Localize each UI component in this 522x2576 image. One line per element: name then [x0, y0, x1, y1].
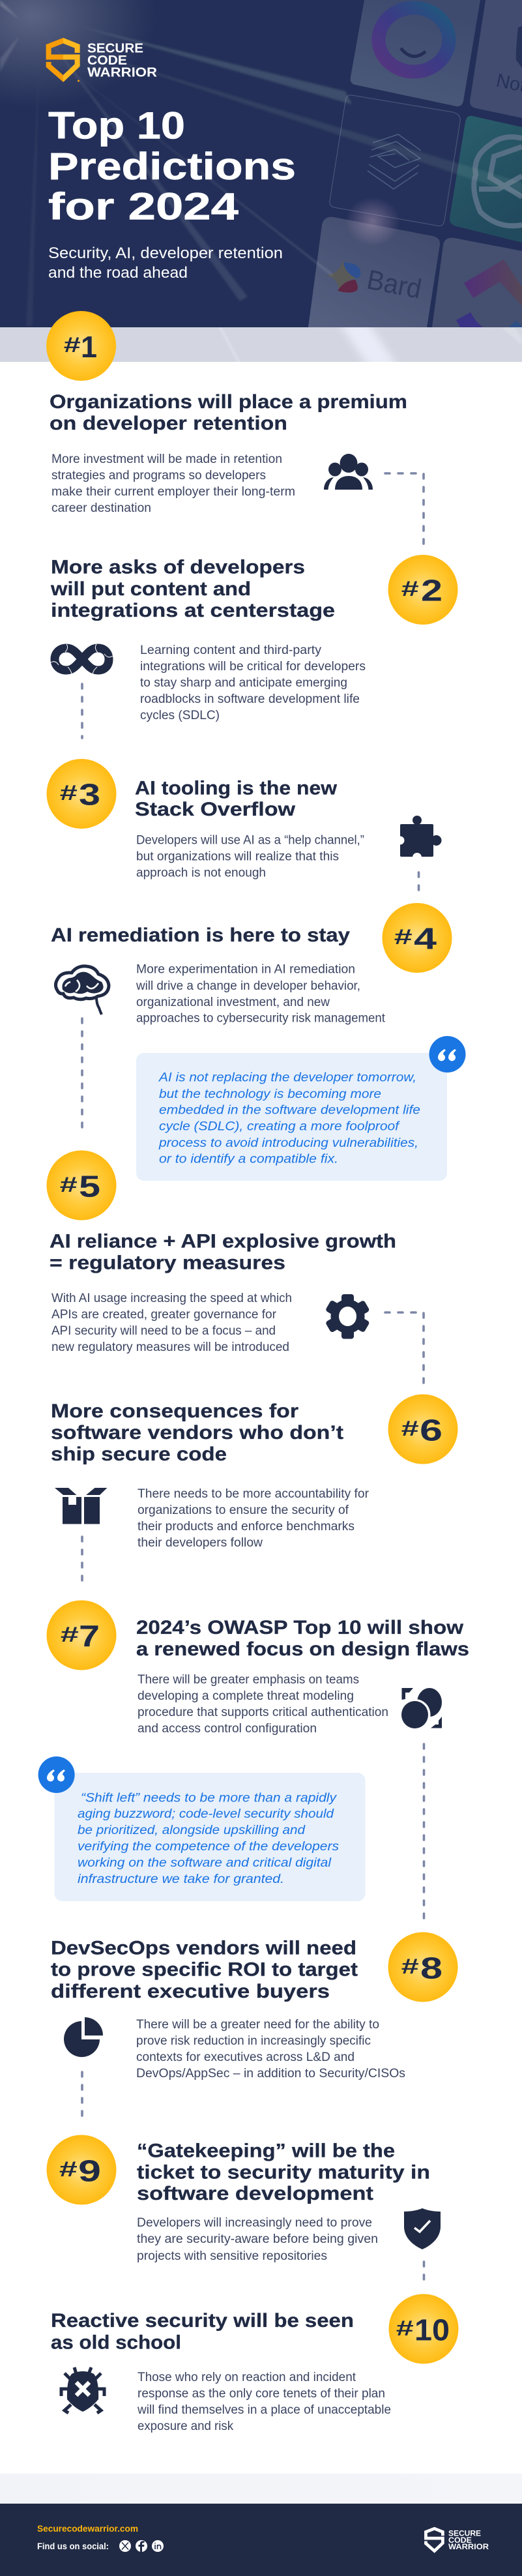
badge: number 3: 3	[79, 778, 100, 812]
badge: number 9	[47, 2135, 116, 2205]
light band under header	[0, 327, 522, 362]
body 2: to stay sharp and anticipate emerging	[140, 676, 347, 690]
heading 9: ticket to security maturity in	[137, 2162, 430, 2184]
body 7	[138, 1673, 388, 1736]
body 5: new regulatory measures will be introduced	[51, 1340, 289, 1354]
badge: number 7: 7	[79, 1619, 100, 1653]
body 2: roadblocks in software development life	[140, 692, 360, 706]
badge: number 4: 4	[414, 922, 437, 956]
panel: prediction 8	[51, 1932, 457, 2116]
badge: number 5: #	[59, 1173, 77, 1196]
heading 9: software development	[137, 2183, 373, 2204]
heading 8: DevSecOps vendors will need	[51, 1938, 356, 1959]
badge: number 3	[47, 759, 116, 829]
icon: bug	[61, 2367, 104, 2413]
heading 1: Organizations will place a premium	[50, 391, 407, 413]
body 8: There will be a greater need for the ability to	[136, 2018, 379, 2032]
icon: quote mark	[38, 1756, 75, 1793]
body 3: but organizations will realize that this	[136, 850, 339, 863]
panel: prediction 7	[38, 1600, 469, 1920]
heading 3	[135, 777, 337, 820]
badge: number 1: 1	[81, 330, 97, 364]
icon: puzzle piece	[396, 816, 442, 862]
body 8: contexts for executives across L&D and	[136, 2050, 355, 2064]
icon: pie chart	[64, 2017, 103, 2057]
card: stacked layers logo	[330, 95, 460, 226]
heading 10: Reactive security will be seen	[51, 2310, 354, 2332]
heading 10: as old school	[51, 2332, 181, 2354]
icon: shield check	[404, 2208, 441, 2249]
icon: quote mark	[429, 1036, 465, 1073]
panel: prediction 2	[50, 555, 458, 738]
body 6: organizations to ensure the security of	[138, 1503, 349, 1517]
card: ChatGPT logo	[450, 116, 522, 243]
callout: AI quote: AI is not replacing the developer tomorrow,	[158, 1071, 416, 1085]
body 9: they are security-aware before being given	[137, 2232, 378, 2246]
footer light band	[0, 2474, 522, 2504]
callout: shift left quote: working on the software and critical digital	[78, 1856, 332, 1870]
badge: number 4: #	[394, 925, 412, 949]
badge: number 10	[388, 2294, 459, 2364]
logo: Secure Code Warrior: WARRIOR	[87, 65, 157, 80]
callout: AI quote: cycle (SDLC), creating a more foolproof	[159, 1120, 400, 1134]
body 1: career destination	[51, 501, 151, 515]
heading 2: More asks of developers	[51, 557, 305, 578]
body 9: Developers will increasingly need to prove	[137, 2216, 372, 2230]
body 4: will drive a change in developer behavior,	[136, 979, 360, 993]
panel: footer	[0, 2504, 522, 2576]
title: for 2024	[48, 185, 239, 228]
lens flare	[345, 197, 400, 246]
arrow: 3 to 4	[418, 872, 420, 892]
heading 6: software vendors who don’t	[51, 1422, 343, 1443]
panel: prediction 4	[51, 903, 465, 1181]
body 6: their products and enforce benchmarks	[138, 1520, 355, 1533]
badge: number 4	[382, 903, 452, 973]
body 2: Learning content and third-party	[140, 644, 322, 657]
arrow: 2 to 3	[81, 684, 83, 738]
heading 6	[51, 1400, 343, 1465]
body 1	[51, 452, 295, 515]
badge: number 10: #	[396, 2317, 413, 2340]
badge: number 9: #	[59, 2157, 77, 2181]
badge: number 8: 8	[420, 1951, 442, 1985]
icon: X	[119, 2540, 131, 2552]
body 2: cycles (SDLC)	[140, 709, 220, 722]
title: Predictions	[48, 145, 296, 188]
body 10: Those who rely on reaction and incident	[138, 2371, 356, 2384]
body 8	[136, 2018, 405, 2080]
body 7: There will be greater emphasis on teams	[138, 1673, 359, 1687]
arrow: 9 to 10	[423, 2262, 425, 2281]
heading 5: AI reliance + API explosive growth	[50, 1231, 396, 1252]
callout: shift left quote: “Shift left” needs to be more than a rapidly	[81, 1791, 338, 1805]
panel: prediction 9	[47, 2135, 441, 2281]
body 3: approach is not enough	[136, 866, 266, 880]
icon: open box	[55, 1488, 107, 1524]
body 10: will find themselves in a place of unacceptable	[137, 2403, 391, 2417]
icon: gear	[325, 1294, 370, 1339]
heading 2: integrations at centerstage	[51, 600, 335, 621]
callout: AI quote: or to identify a compatible fix.	[159, 1153, 338, 1166]
badge: number 6: #	[401, 1417, 418, 1440]
callout: shift left quote: verifying the competence of the developers	[78, 1840, 340, 1854]
badge: number 3: #	[59, 781, 77, 805]
logo: Secure Code Warrior: SECURE	[87, 41, 143, 56]
badge: number 1	[46, 311, 116, 381]
arrow: 5 to 6	[385, 1312, 424, 1385]
card: Bard logo: Bard	[364, 264, 424, 304]
badge: number 5: 5	[79, 1170, 100, 1204]
logo: footer: CODE	[448, 2537, 472, 2545]
arrow: 8 to 9	[81, 2072, 83, 2116]
badge: number 7	[47, 1600, 116, 1670]
badge: number 8: #	[401, 1955, 418, 1978]
heading 9	[137, 2140, 430, 2204]
callout: shift left quote	[55, 1773, 365, 1901]
body 6: their developers follow	[138, 1536, 263, 1550]
badge: number 2: #	[401, 577, 418, 600]
callout: shift left quote: be prioritized, alongside upskilling and	[78, 1824, 306, 1837]
heading 7: 2024’s OWASP Top 10 will show	[136, 1617, 463, 1638]
body 5: API security will need to be a focus – and	[51, 1324, 276, 1338]
heading 4: AI remediation is here to stay	[51, 925, 351, 946]
badge: number 7: #	[60, 1623, 78, 1646]
body 4: organizational investment, and new	[136, 996, 330, 1009]
heading 1	[50, 391, 407, 434]
heading 2: will put content and	[50, 578, 251, 600]
body 3	[136, 833, 364, 880]
title: Top 10	[48, 104, 185, 147]
arrow: 7 to 8	[423, 1744, 425, 1920]
body 8: DevOps/AppSec – in addition to Security/CISOs	[136, 2067, 405, 2080]
body 8: prove risk reduction in increasingly specific	[136, 2034, 371, 2048]
card: Bard logo	[308, 217, 440, 327]
panel: prediction 1	[46, 311, 424, 546]
callout: AI quote: process to avoid introducing vulnerabilities,	[158, 1136, 418, 1150]
body 1: More investment will be made in retention	[51, 452, 282, 466]
badge: number 8	[388, 1932, 457, 2002]
logo: Secure Code Warrior: CODE	[87, 53, 127, 68]
body 1: make their current employer their long-term	[51, 485, 295, 499]
callout: shift left quote: aging buzzword; code-level security should	[78, 1807, 335, 1821]
heading 5	[50, 1231, 396, 1273]
heading 8: different executive buyers	[51, 1981, 330, 2002]
badge: number 6: 6	[420, 1414, 442, 1447]
body 6: There needs to be more accountability for	[138, 1487, 370, 1501]
body 10	[137, 2371, 391, 2433]
website link: Securecodewarrior.com	[37, 2524, 138, 2534]
panel: prediction 5	[47, 1150, 424, 1385]
heading 10	[51, 2310, 354, 2354]
light glow	[0, 0, 156, 108]
body 4: approaches to cybersecurity risk management	[136, 1012, 386, 1026]
badge: number 2: 2	[421, 574, 442, 608]
panel: prediction 3	[47, 759, 442, 892]
body 10: response as the only core tenets of their plan	[138, 2387, 385, 2401]
title	[48, 104, 296, 228]
callout: AI quote: embedded in the software development life	[159, 1104, 420, 1118]
heading 2	[50, 557, 335, 621]
heading 7: a renewed focus on design flaws	[136, 1638, 469, 1660]
logo: footer: SECURE	[448, 2530, 481, 2538]
icon: people	[324, 454, 373, 490]
callout: AI quote	[136, 1053, 447, 1181]
badge: number 5	[47, 1150, 116, 1221]
card: assistant logo	[351, 0, 480, 106]
panel: prediction 6	[51, 1394, 457, 1582]
body 7: procedure that supports critical authentication	[138, 1706, 388, 1719]
subtitle: and the road ahead	[48, 264, 188, 282]
logo: footer: WARRIOR	[448, 2543, 489, 2551]
body 2	[140, 644, 366, 722]
heading 5: = regulatory measures	[50, 1252, 285, 1273]
badge: number 6	[388, 1394, 457, 1464]
card: Notion logo	[470, 0, 522, 118]
heading 6: ship secure code	[51, 1443, 227, 1465]
arrow: 4 to 5	[81, 1018, 83, 1129]
body 7: and access control configuration	[138, 1722, 317, 1736]
body 4	[136, 963, 386, 1026]
badge: number 2	[388, 555, 457, 625]
social label: Find us on social:	[37, 2541, 109, 2551]
body 4: More experimentation in AI remediation	[136, 963, 355, 977]
card: chevron logo	[432, 238, 522, 327]
icon: infinity	[51, 644, 113, 674]
heading 3: AI tooling is the new	[135, 777, 337, 799]
arrow: 1 to 2	[385, 473, 424, 546]
icon: LinkedIn	[152, 2540, 164, 2552]
icon: threat model	[400, 1688, 442, 1730]
badge: number 1: #	[63, 333, 80, 357]
body 1: strategies and programs so developers	[51, 469, 266, 482]
heading 8	[51, 1938, 358, 2002]
body 2: integrations will be critical for developers	[140, 660, 366, 674]
heading 7	[136, 1617, 469, 1660]
light rays	[0, 0, 522, 326]
body 7: developing a complete threat modeling	[138, 1689, 354, 1703]
heading 3: Stack Overflow	[135, 799, 295, 820]
heading 1: on developer retention	[50, 413, 287, 434]
body 6	[138, 1487, 370, 1550]
body 5: APIs are created, greater governance for	[51, 1308, 277, 1322]
heading 9: “Gatekeeping” will be the	[137, 2140, 395, 2162]
subtitle	[48, 244, 283, 282]
arrow: 6 to 7	[81, 1537, 83, 1582]
body 5	[51, 1292, 292, 1354]
badge: number 10: 10	[414, 2313, 450, 2347]
callout: shift left quote: infrastructure we take for granted.	[78, 1873, 284, 1886]
icon: Facebook	[136, 2540, 147, 2552]
icon: brain	[55, 966, 109, 1014]
logo: Secure Code Warrior	[49, 40, 157, 82]
subtitle: Security, AI, developer retention	[48, 244, 283, 262]
body 9: projects with sensitive repositories	[137, 2249, 327, 2263]
body 5: With AI usage increasing the speed at which	[51, 1292, 292, 1305]
body 9	[137, 2216, 378, 2263]
heading 6: More consequences for	[51, 1400, 299, 1422]
panel: prediction 10	[51, 2294, 459, 2433]
badge: number 9: 9	[78, 2154, 101, 2188]
logo: footer	[426, 2528, 489, 2551]
panel: header	[0, 0, 522, 327]
body 3: Developers will use AI as a “help channel,”	[136, 833, 364, 848]
body 10: exposure and risk	[138, 2420, 233, 2433]
callout: AI quote: but the technology is becoming more	[159, 1088, 381, 1101]
heading 8: to prove specific ROI to target	[51, 1959, 358, 1981]
